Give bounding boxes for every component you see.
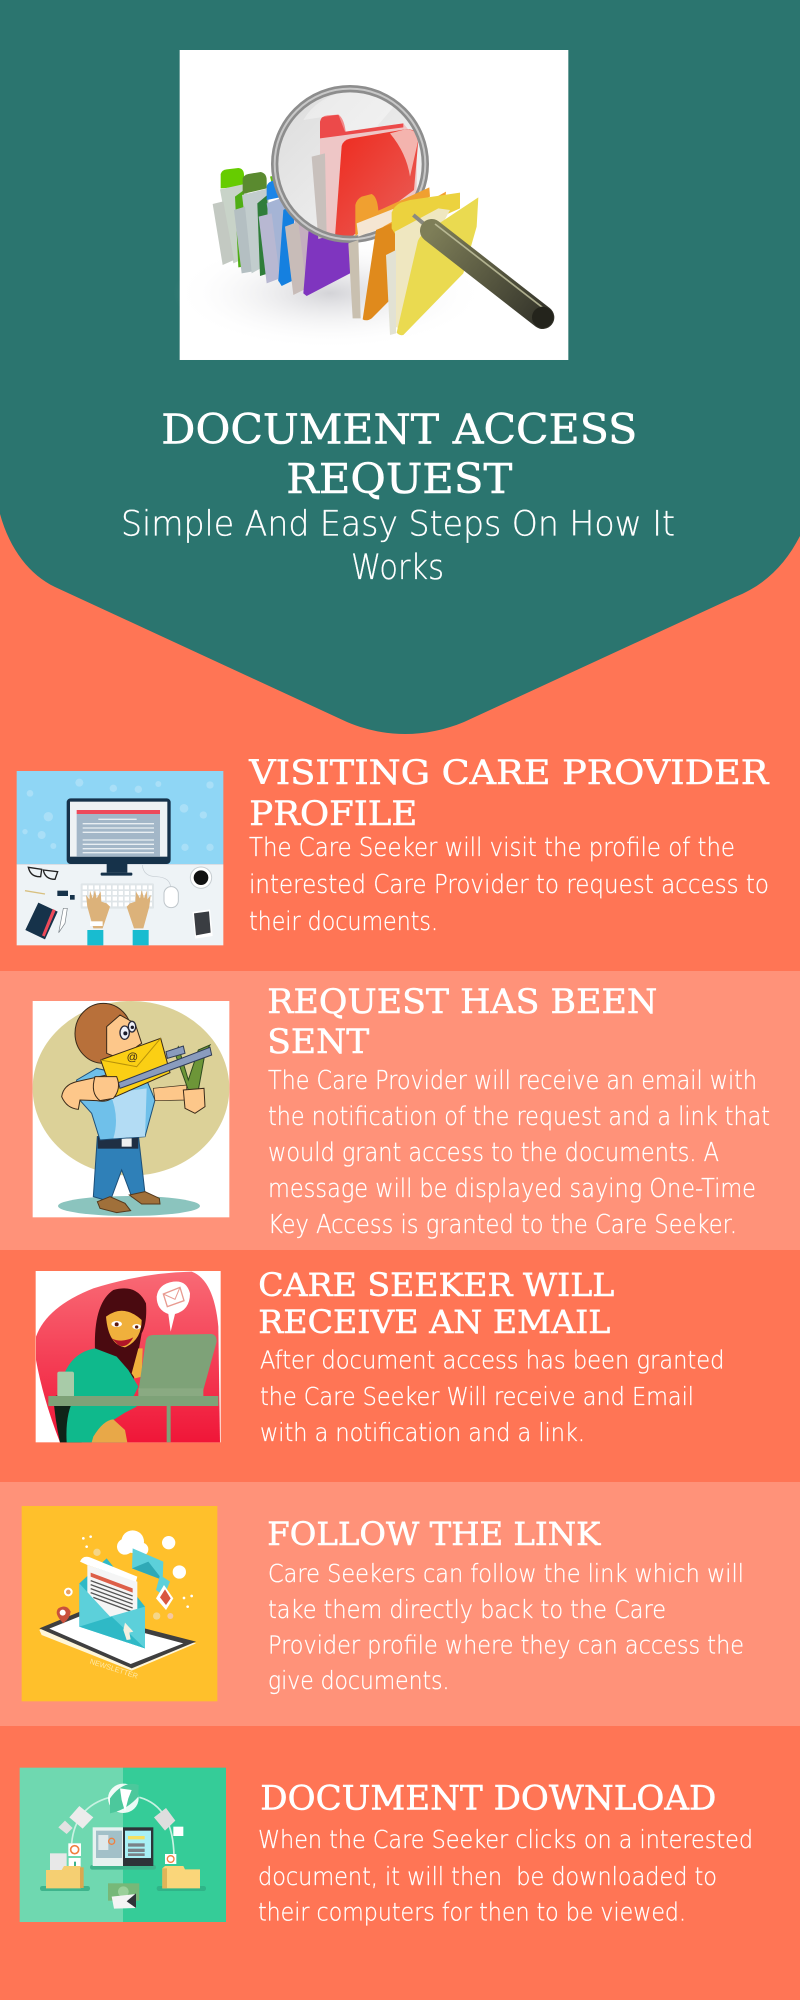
description: document, it will then be downloaded to [258, 1862, 717, 1891]
icon: desk with computer [17, 771, 223, 945]
subtitle: Simple And Easy Steps On How It [121, 504, 675, 544]
subtitle: Works [351, 548, 444, 588]
icon: man with slingshot and envelope: @ [127, 1052, 138, 1064]
heading [267, 982, 657, 1062]
description: Key Access is granted to the Care Seeker. [268, 1210, 737, 1240]
description [268, 1066, 770, 1240]
step 2: request has been sent [33, 982, 770, 1240]
header panel [0, 0, 800, 734]
description: with a notification and a link. [260, 1418, 585, 1447]
title: REQUEST [286, 455, 512, 503]
heading: RECEIVE AN EMAIL [258, 1303, 610, 1341]
heading: FOLLOW THE LINK [267, 1515, 601, 1553]
description [258, 1825, 753, 1926]
description: their documents. [249, 907, 438, 937]
description: Provider profile where they can access the [268, 1630, 744, 1660]
step 4: follow the link [22, 1506, 744, 1701]
description [260, 1346, 724, 1447]
icon: newsletter envelope on tablet: NEWSLETTER [89, 1657, 139, 1681]
step 5: document download [20, 1768, 753, 1926]
band: step 2 background [0, 971, 800, 1250]
description: The Care Seeker will visit the profile of the [249, 833, 735, 863]
description: their computers for then to be viewed. [258, 1898, 686, 1926]
description: Care Seekers can follow the link which will [268, 1559, 744, 1588]
description [249, 833, 769, 937]
heading: PROFILE [249, 794, 417, 834]
heading: SENT [267, 1022, 370, 1062]
heading [258, 1266, 614, 1341]
icon: woman at laptop [36, 1271, 221, 1442]
description: would grant access to the documents. A [268, 1138, 719, 1168]
heading: VISITING CARE PROVIDER [248, 753, 770, 793]
description: give documents. [268, 1666, 450, 1695]
title: DOCUMENT ACCESS [161, 406, 637, 454]
heading [248, 753, 770, 834]
step 1: visiting care provider profile [17, 753, 770, 945]
icon: newsletter envelope on tablet [22, 1506, 217, 1701]
heading: REQUEST HAS BEEN [267, 982, 657, 1022]
description: After document access has been granted [260, 1346, 724, 1374]
subtitle [121, 504, 675, 588]
description [268, 1559, 744, 1695]
icon: documents, globe and folders [20, 1768, 226, 1922]
description: When the Care Seeker clicks on a interested [258, 1825, 753, 1854]
image: folders and magnifying glass [173, 50, 568, 360]
step 3: care seeker will receive an email [36, 1266, 725, 1447]
title [161, 406, 637, 503]
heading: DOCUMENT DOWNLOAD [260, 1778, 716, 1818]
heading: CARE SEEKER WILL [258, 1266, 614, 1304]
icon: man with slingshot and envelope [33, 1001, 229, 1217]
description: the Care Seeker Will receive and Email [260, 1382, 694, 1411]
description: take them directly back to the Care [268, 1595, 666, 1624]
band: step 4 background [0, 1482, 800, 1726]
